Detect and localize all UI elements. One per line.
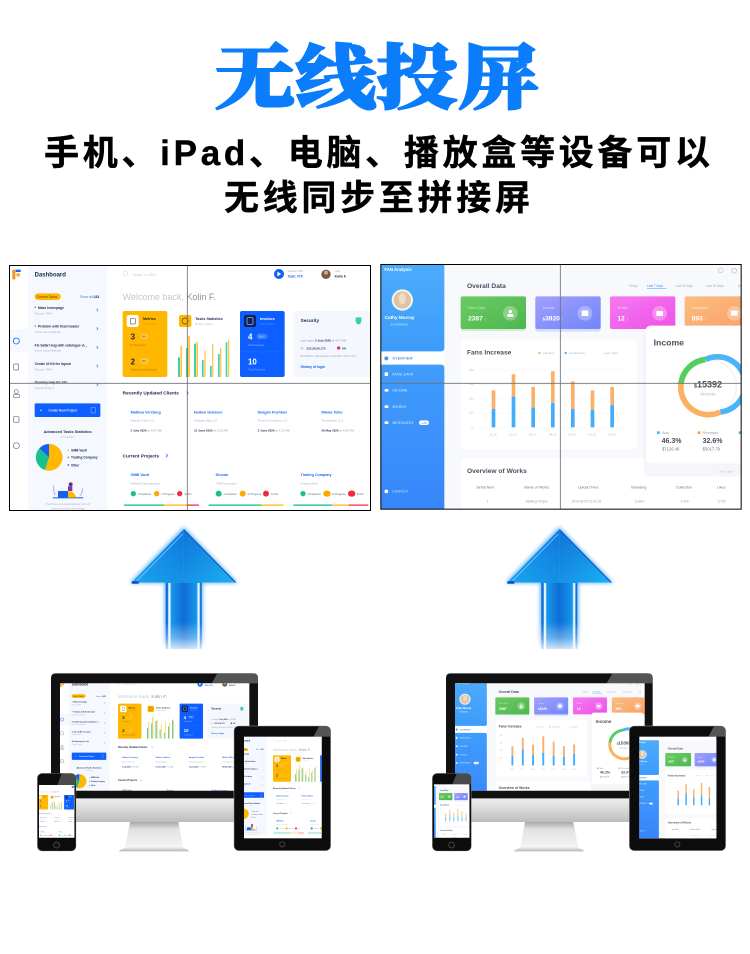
stat card: income xyxy=(535,296,601,332)
metrics card: 2 xyxy=(131,357,136,366)
security card xyxy=(293,311,371,377)
income card: $5017.79 xyxy=(703,446,721,451)
overview of works table: Last 7 days xyxy=(718,469,733,473)
stat card: works: 12 ↑ xyxy=(617,316,629,323)
fan sidebar: WORKS xyxy=(392,405,407,409)
metrics card: 38% xyxy=(141,335,147,338)
overall data heading and tabs: Overall Data xyxy=(467,283,506,290)
stat card: fans data: 2387 ↑ xyxy=(468,316,487,323)
invoices card: 10 xyxy=(248,357,257,366)
tasks statistics bars: Tasks Statistics xyxy=(195,317,223,321)
overview of works table: Collection xyxy=(676,485,692,489)
income card: Rewards xyxy=(703,430,718,435)
dashboard sidebar: Other xyxy=(71,463,80,467)
fans increase chart: 08:10 xyxy=(549,433,557,437)
overview of works table: 1 xyxy=(487,499,489,503)
current projects: In Progress xyxy=(161,492,176,496)
current projects: Website Development xyxy=(131,481,160,485)
fans increase chart: Fans Increase xyxy=(467,350,512,357)
phone xyxy=(432,773,472,852)
stat card: works: Works xyxy=(617,306,628,310)
dashboard sidebar: Dashboard xyxy=(35,272,66,278)
current projects: To-Do xyxy=(357,492,364,496)
dashboard sidebar: Fix Safari bug with catalogue vi... xyxy=(35,343,87,347)
video wall: fan analysis xyxy=(381,264,750,512)
dashboard sidebar: Crypto Project xyxy=(35,386,54,390)
recently updated clients: Mathew Verstong xyxy=(131,410,161,414)
security card: UK xyxy=(342,346,347,350)
phone xyxy=(37,773,76,852)
dashboard sidebar: Coca Juice Website xyxy=(35,349,61,353)
tablet xyxy=(234,726,331,851)
dashboard topbar xyxy=(123,269,347,279)
fans increase chart: 10:10 xyxy=(509,433,517,437)
current projects: GMB Vault xyxy=(131,473,150,477)
stat card: messages xyxy=(685,296,750,329)
fans increase chart: Last Num xyxy=(543,351,555,355)
recently updated clients: Recently Updated Clients xyxy=(123,391,179,396)
overview of works table xyxy=(461,458,748,512)
current projects: To-Do xyxy=(271,492,279,496)
arrow: right xyxy=(505,527,613,654)
invoices card: Total Amount xyxy=(248,368,265,372)
video wall: dashboard xyxy=(9,265,371,511)
dashboard sidebar: + xyxy=(40,409,42,413)
stat card: messages: Messages xyxy=(692,306,708,310)
recently updated clients: 5 July 2020 at 6:07 AM xyxy=(131,429,162,433)
title: 无线投屏 xyxy=(214,22,539,123)
current projects: Trading Area xyxy=(301,481,318,485)
current projects: Completed xyxy=(308,492,321,496)
current projects: In Progress xyxy=(332,492,346,496)
fan sidebar: INCOME xyxy=(392,389,408,393)
dashboard sidebar: Diundo CRM xyxy=(35,367,52,371)
stat card: works xyxy=(610,296,675,329)
current projects: CRM for project xyxy=(216,481,237,485)
income card: Ads xyxy=(662,430,669,435)
metrics card xyxy=(123,311,167,377)
recently updated clients: 10 June 2020 at 3:22 AM xyxy=(194,429,228,433)
recently updated clients xyxy=(123,391,355,433)
welcome heading: Welcome back, Kolin F. xyxy=(123,292,216,302)
overview of works table: Name of Works xyxy=(524,485,549,489)
fan sidebar: ID:57684426 xyxy=(391,323,408,327)
dashboard sidebar: Problem with fixed header xyxy=(38,325,80,329)
fan sidebar: FANS DATA xyxy=(392,373,414,377)
invoices card: Invoices xyxy=(260,317,275,321)
dashboard sidebar: every once and a see through xyxy=(52,507,85,510)
security card: IP: 213.29.26.173 xyxy=(301,346,326,350)
fans increase chart: 06:10 xyxy=(608,433,616,437)
recently updated clients: Techerfright LLC xyxy=(321,419,344,423)
fan sidebar: Cathy Murray xyxy=(385,315,415,320)
dashboard sidebar: Create UI Kit for layout xyxy=(35,362,72,366)
overall data heading and tabs: Last 7 days xyxy=(647,284,664,288)
fans increase chart: Last 7 days xyxy=(604,351,619,355)
dashboard topbar: Monday 2389 xyxy=(288,270,303,273)
metrics card: Metrics xyxy=(143,317,156,321)
dashboard sidebar: Trading Company xyxy=(71,456,98,460)
current projects: Current Projects xyxy=(123,453,160,458)
current projects: Trading Company xyxy=(301,473,333,477)
recently updated clients: Mazaki Trans LLC xyxy=(131,419,156,423)
fans increase chart: 09:10 xyxy=(529,433,537,437)
metrics card: Your Projects xyxy=(143,323,158,326)
overall data heading and tabs xyxy=(467,268,741,290)
overview of works table: 13,804 xyxy=(634,499,644,503)
stat card: fans data xyxy=(461,296,526,331)
fans increase chart: 0 xyxy=(471,425,473,429)
income card: 46.3% xyxy=(662,438,682,445)
metrics card: In Progress xyxy=(131,343,146,347)
fans increase chart: Female Fans xyxy=(569,351,586,355)
invoices card: 4 xyxy=(248,333,253,342)
dashboard sidebar: If archives are located instantly and only xyxy=(46,503,91,506)
fan sidebar: LOGOUT xyxy=(392,490,408,494)
recently updated clients: 2 June 2020 at 7:12 AM xyxy=(258,429,290,433)
invoices card: Outstanding xyxy=(248,343,264,347)
dashboard topbar: Task: #79 xyxy=(288,275,303,279)
recently updated clients: Holken Gelelsen xyxy=(194,410,222,414)
current projects: Completed xyxy=(138,492,151,496)
metrics card: 3 xyxy=(131,333,136,342)
overview of works table: Likes xyxy=(717,485,726,489)
metrics card: Nearing Completion xyxy=(131,368,157,372)
current projects: Diundo xyxy=(216,473,229,477)
invoices card xyxy=(240,311,285,377)
security card: Security xyxy=(301,318,319,323)
dashboard sidebar: All Statistics xyxy=(61,435,75,439)
fans increase chart: 400 xyxy=(469,368,474,372)
monitor xyxy=(446,673,653,851)
dashboard sidebar: Coca Juice Website xyxy=(35,330,61,334)
income card xyxy=(644,326,746,477)
tasks statistics bars xyxy=(178,315,229,377)
monitor xyxy=(51,673,258,851)
recently updated clients: 29 May 2020 at 4:41 PM xyxy=(321,429,355,433)
security card: Mozilla/5.0 (Macintosh; Intel Mac OS X 10.0 xyxy=(301,354,356,358)
overview of works table: 3,792 xyxy=(718,499,726,503)
dashboard sidebar: Current Tasks xyxy=(37,295,57,299)
fan sidebar xyxy=(381,264,444,509)
recently updated clients: Hellogen Big LLC xyxy=(194,419,218,423)
dashboard topbar: Kolin F. xyxy=(335,275,347,279)
metrics card: 25% xyxy=(141,360,147,363)
overall data heading and tabs: Last 30 days xyxy=(675,284,693,288)
overview of works table: Browsing xyxy=(631,485,646,489)
subtitle line 1: 手机、iPad、电脑、播放盒等设备可以 xyxy=(44,134,710,173)
dashboard sidebar: GMB Vault xyxy=(71,449,88,453)
fans increase chart: 100 xyxy=(469,411,474,415)
dashboard sidebar: Make homepage xyxy=(38,306,64,310)
fan sidebar: OVERVIEW xyxy=(392,357,413,361)
overall data heading and tabs: Today xyxy=(629,284,638,288)
current projects: In Progress xyxy=(248,492,262,496)
income card: Income xyxy=(700,392,716,397)
overview of works table: 2019-08-05 12:01:28 xyxy=(572,499,601,503)
dashboard topbar: Search in CRM... xyxy=(133,273,158,277)
overview of works table: Walking People xyxy=(526,499,548,503)
fan sidebar: +26 xyxy=(421,421,427,425)
device group: right xyxy=(423,673,750,851)
tablet xyxy=(629,726,726,851)
overview of works table: 3,409 xyxy=(681,499,689,503)
overview of works table: Overview of Works xyxy=(467,468,527,475)
income card: Income xyxy=(654,337,684,347)
fans increase chart xyxy=(461,339,637,449)
current projects: To-Do xyxy=(184,492,192,496)
income card: 32.6% xyxy=(703,438,723,445)
overview of works table: Upload Time xyxy=(578,485,599,489)
overview of works table: Serial Num xyxy=(476,485,494,489)
income card: $15392 xyxy=(694,379,722,389)
stat card: income: $3920 ↑ xyxy=(543,316,564,323)
security card: History of login xyxy=(301,365,325,369)
overall data heading and tabs: Last 90 days xyxy=(706,284,724,288)
invoices card: Your Invoices xyxy=(260,323,276,326)
current projects: Completed xyxy=(224,492,237,496)
invoices card: $8M xyxy=(259,335,264,338)
income card: $7126.49 xyxy=(662,446,680,451)
subtitle line 2: 无线同步至拼接屏 xyxy=(224,170,530,221)
overall data heading and tabs: All xyxy=(738,284,741,288)
device group: left xyxy=(37,673,331,852)
fans increase chart: 04:10 xyxy=(569,433,576,437)
dashboard sidebar: Show all 243 xyxy=(80,295,99,299)
dashboard sidebar xyxy=(10,265,107,511)
dashboard sidebar: Diundo CRM xyxy=(35,311,52,315)
dashboard sidebar: Develop map for site xyxy=(35,381,68,385)
fans increase chart: 300 xyxy=(469,382,474,386)
fan sidebar: MESSAGES xyxy=(392,421,414,425)
stat card: income: Income xyxy=(543,306,555,310)
recently updated clients: Pintech Company LLC xyxy=(258,419,288,423)
fan sidebar: FAN Analysis xyxy=(384,267,412,272)
security card: Last login: 5 July 2020 at 4:07 AM xyxy=(301,339,347,343)
arrow: left xyxy=(130,527,238,654)
current projects xyxy=(123,453,368,506)
fans increase chart: 06:10 xyxy=(589,433,596,437)
dashboard topbar: User xyxy=(335,270,340,273)
recently updated clients: Nikola Telko xyxy=(321,410,343,414)
stat card: fans data: Fans Data xyxy=(468,306,486,310)
dashboard sidebar: Advanced Tasks Statistics xyxy=(44,430,92,434)
tasks statistics bars: By Day & Week xyxy=(195,323,213,326)
stat card: messages: 893 ↑ xyxy=(692,316,707,323)
fans increase chart: 200 xyxy=(469,396,474,400)
recently updated clients: Ibragim Pushkov xyxy=(258,410,288,414)
dashboard sidebar: Create New Project xyxy=(48,409,78,413)
fans increase chart: 11:10 xyxy=(489,433,497,437)
